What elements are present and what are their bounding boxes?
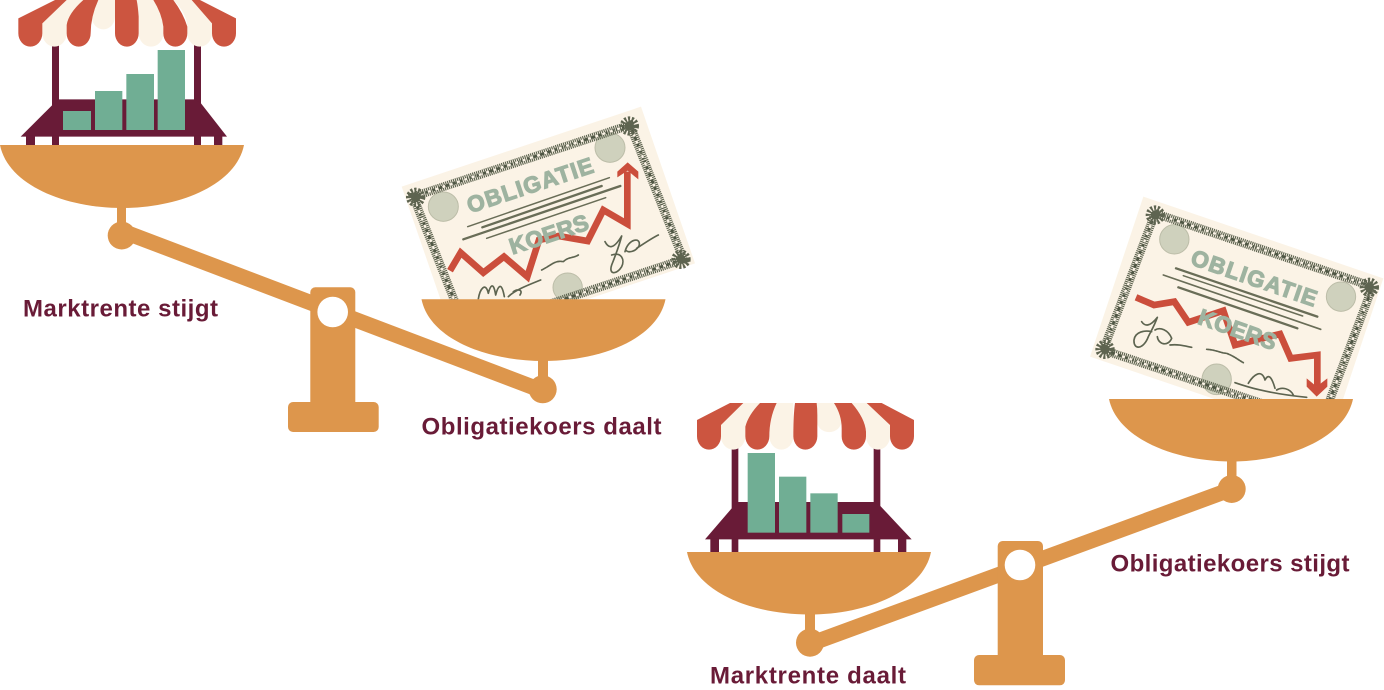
bond certificate with falling line — [1090, 196, 1384, 399]
label: Marktrente stijgt: Marktrente stijgt — [23, 296, 218, 322]
fine print lines — [463, 178, 620, 239]
certificate text OBLIGATIE: OBLIGATIE — [1188, 244, 1321, 312]
left pan — [0, 145, 244, 208]
label: Marktrente daalt: Marktrente daalt — [710, 662, 906, 690]
certificate paper — [1090, 196, 1384, 399]
striped awning — [18, 0, 236, 47]
scale 2: market rate falls, bond price rises — [687, 197, 1383, 690]
seals — [1160, 225, 1356, 395]
right pan — [422, 299, 666, 361]
label: Obligatiekoers stijgt: Obligatiekoers stijgt — [1110, 550, 1350, 578]
scale 1: market rate rises, bond price falls — [0, 0, 695, 440]
rising bar chart — [63, 50, 185, 130]
certificate text OBLIGATIE: OBLIGATIE — [463, 152, 597, 218]
certificate text KOERS: KOERS — [506, 209, 592, 259]
label: Obligatiekoers daalt: Obligatiekoers daalt — [422, 414, 662, 440]
stall posts and table — [21, 43, 227, 146]
falling bar chart — [748, 453, 869, 533]
signatures — [478, 235, 658, 299]
certificate text KOERS: KOERS — [1195, 304, 1280, 355]
balance beam, stems and pivot — [796, 459, 1246, 685]
market stall with falling bars — [697, 403, 914, 553]
right pan — [1109, 399, 1353, 462]
falling price line with arrow — [1136, 297, 1327, 397]
balance beam, stems and pivot — [108, 205, 557, 432]
bond certificate with rising line — [402, 106, 695, 300]
ornamental border — [1100, 210, 1374, 423]
striped awning — [697, 403, 914, 450]
seals — [428, 133, 625, 302]
certificate paper — [402, 106, 695, 300]
rising price line with arrow — [450, 162, 638, 277]
left pan — [687, 552, 931, 614]
market stall with rising bars — [18, 0, 236, 146]
fine print lines — [1163, 268, 1321, 329]
signatures — [1134, 317, 1307, 397]
ornamental border — [411, 121, 686, 332]
stall posts and table — [705, 445, 912, 553]
